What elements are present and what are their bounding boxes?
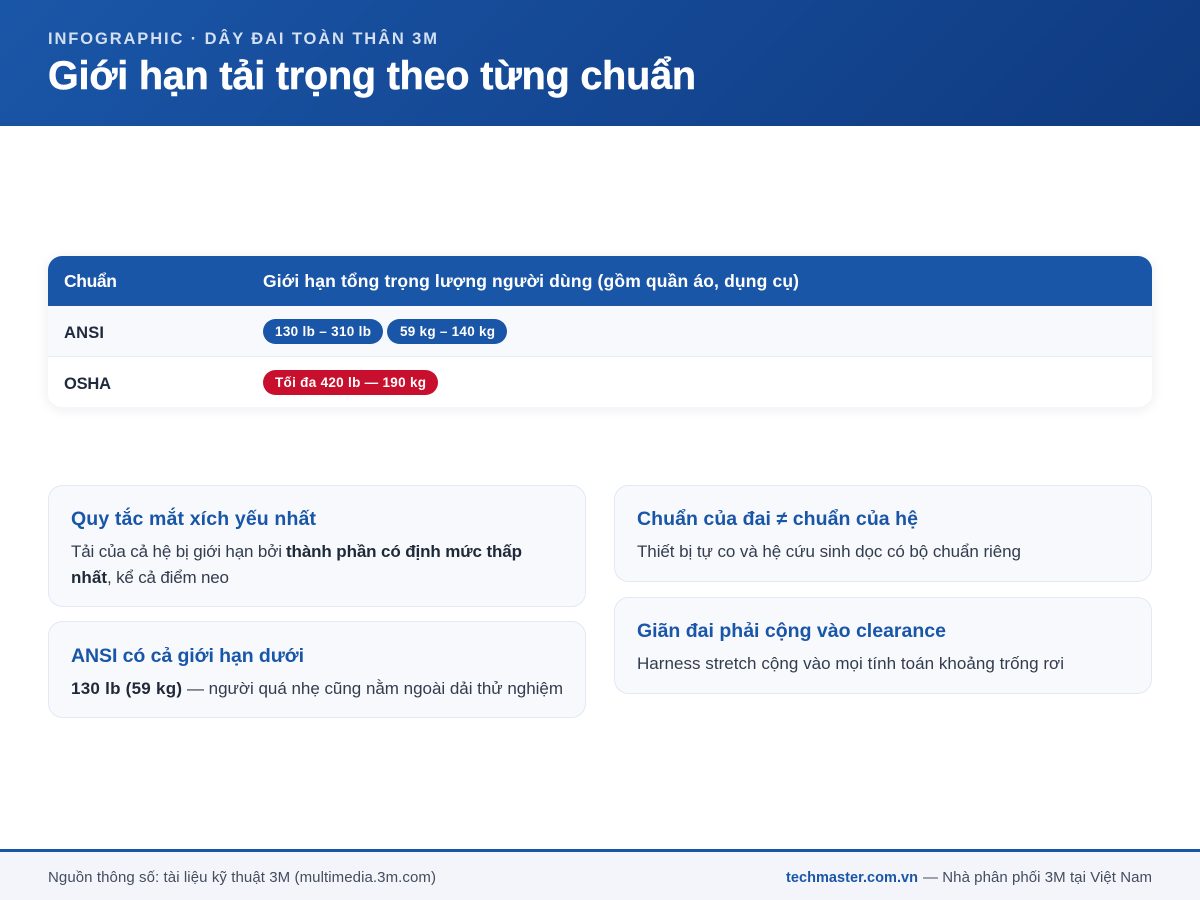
footer xyxy=(0,849,1200,900)
card: harness vs system standard xyxy=(614,486,1152,582)
card body: Thiết bị tự co và hệ cứu sinh dọc có bộ chuẩn riêng xyxy=(637,542,1021,561)
card body: Tải của cả hệ bị giới hạn bởi xyxy=(71,542,282,561)
card title: Quy tắc mắt xích yếu nhất xyxy=(71,506,316,530)
distributor credit: — Nhà phân phối 3M tại Việt Nam xyxy=(923,869,1152,886)
title: Giới hạn tải trọng theo từng chuẩn xyxy=(48,54,696,98)
card title: Giãn đai phải cộng vào clearance xyxy=(637,620,946,642)
card: weakest link rule xyxy=(48,486,586,606)
pill: ANSI kilograms: 59 kg – 140 kg xyxy=(400,324,495,339)
eyebrow: INFOGRAPHIC · DÂY ĐAI TOÀN THÂN 3M xyxy=(48,29,437,48)
source note: Nguồn thông số: tài liệu kỹ thuật 3M (multimedia.3m.com) xyxy=(48,869,436,886)
card body: thành phần có định mức thấp xyxy=(286,542,522,561)
pill: ANSI kilograms xyxy=(387,319,507,344)
card body: nhất xyxy=(71,568,107,587)
panel: load limit table xyxy=(48,256,1152,407)
header band xyxy=(0,0,1200,126)
card body: , kể cả điểm neo xyxy=(107,568,229,587)
pill: ANSI pounds: 130 lb – 310 lb xyxy=(275,324,371,339)
card title: Chuẩn của đai ≠ chuẩn của hệ xyxy=(637,508,918,530)
card: harness stretch xyxy=(614,598,1152,694)
pill: OSHA maximum: Tối đa 420 lb — 190 kg xyxy=(275,375,426,390)
table header: limit column: Giới hạn tổng trọng lượng người dùng (gồm quần áo, dụng cụ) xyxy=(263,271,799,291)
row label: ANSI: ANSI xyxy=(64,324,104,342)
card body: 130 lb (59 kg) xyxy=(71,679,182,698)
row label: OSHA: OSHA xyxy=(64,375,111,393)
distributor credit: techmaster.com.vn xyxy=(786,870,918,886)
card: ANSI lower limit xyxy=(48,622,586,718)
pill: OSHA maximum xyxy=(263,370,438,395)
pill: ANSI pounds xyxy=(263,319,383,344)
card title: ANSI có cả giới hạn dưới xyxy=(71,645,304,667)
card body: — người quá nhẹ cũng nằm ngoài dải thử nghiệm xyxy=(187,679,563,698)
distributor credit xyxy=(786,869,1152,886)
table header: standard column: Chuẩn xyxy=(64,271,117,291)
card body: Harness stretch cộng vào mọi tính toán khoảng trống rơi xyxy=(637,654,1064,673)
card body xyxy=(71,542,522,587)
